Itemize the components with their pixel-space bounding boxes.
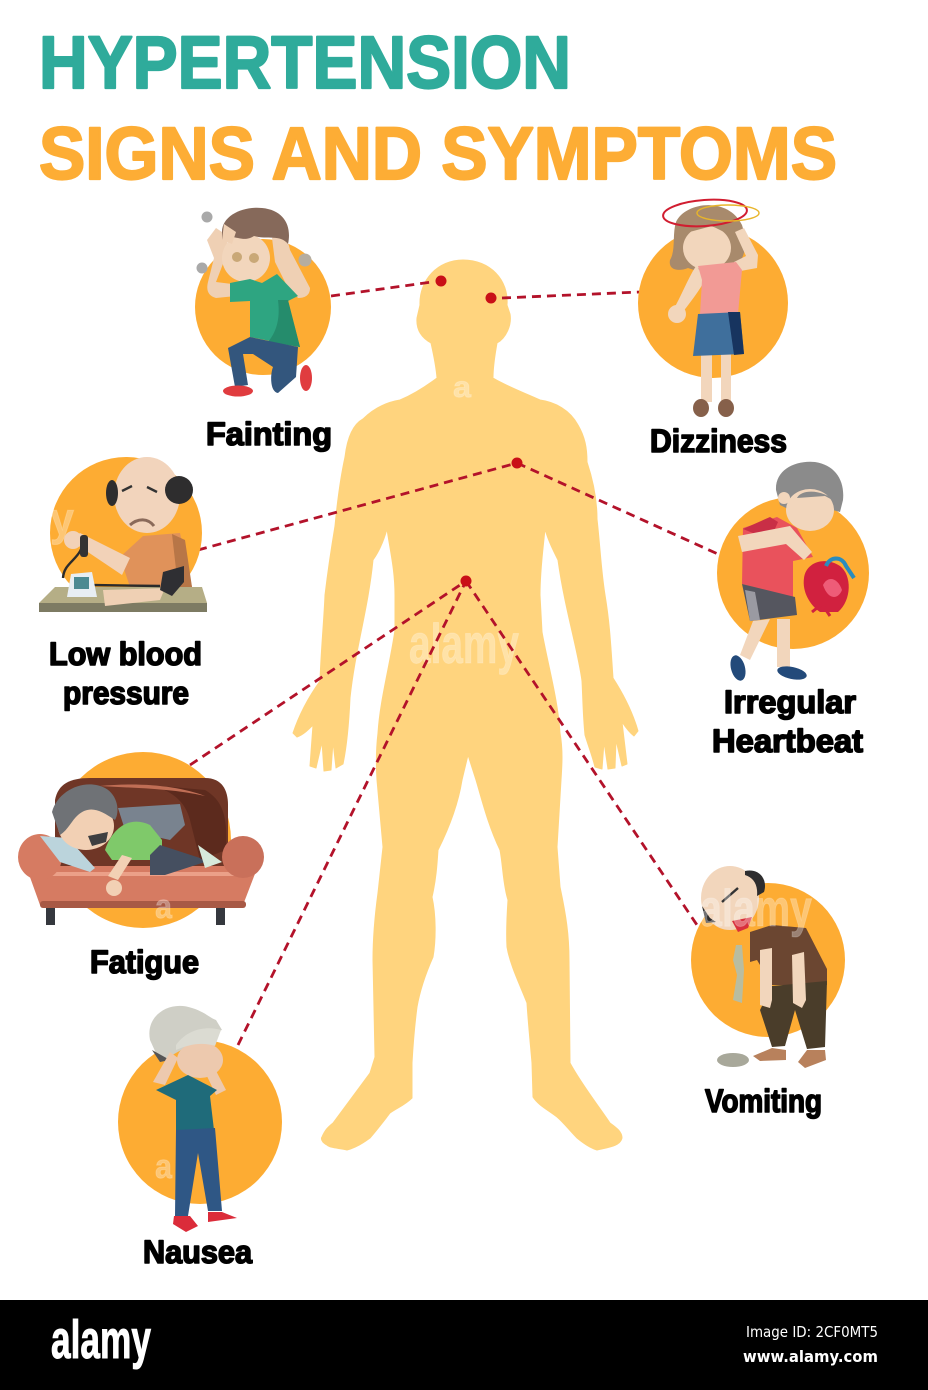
panel: dizziness	[638, 197, 788, 459]
label: Low blood pressure: Low blood	[49, 636, 202, 672]
label: Fatigue: Fatigue	[90, 944, 199, 980]
panel: low blood pressure: y	[50, 493, 74, 545]
footer url: www.alamy.com	[743, 1347, 878, 1366]
panel: fatigue	[18, 752, 264, 980]
red marker dots	[436, 276, 522, 586]
title: SIGNS AND SYMPTOMS	[39, 112, 837, 195]
panel: vomiting	[691, 866, 845, 1119]
panel: low blood pressure	[39, 457, 207, 711]
label: Dizziness: Dizziness	[650, 423, 787, 459]
footer bar	[0, 1300, 928, 1390]
watermark letter: a	[155, 888, 173, 926]
watermark on vomiting figure: alamy	[700, 880, 812, 938]
title: HYPERTENSION	[39, 21, 571, 104]
label: Low blood pressure: pressure	[63, 675, 189, 711]
dashed connector lines	[190, 282, 720, 1045]
label: Irregular Heartbeat: Irregular	[724, 684, 856, 720]
footer image id: Image ID: 2CF0MT5	[746, 1323, 878, 1341]
panel: irregular heartbeat	[712, 462, 869, 759]
label: Fainting: Fainting	[206, 416, 332, 452]
watermark on body	[409, 371, 519, 675]
panel: nausea	[118, 1006, 282, 1270]
title	[39, 21, 837, 195]
label: Low blood pressure	[49, 636, 202, 711]
label: Nausea: Nausea	[143, 1234, 252, 1270]
watermark on body: alamy	[409, 612, 519, 675]
label: Irregular Heartbeat: Heartbeat	[712, 723, 863, 759]
label: Vomiting: Vomiting	[705, 1083, 822, 1119]
body silhouette	[293, 260, 638, 1150]
label: Irregular Heartbeat	[712, 684, 863, 759]
watermark letter: a	[155, 1148, 173, 1186]
panel: fainting	[195, 208, 332, 452]
watermark on body: a	[453, 371, 471, 404]
footer logo: alamy	[51, 1310, 151, 1370]
